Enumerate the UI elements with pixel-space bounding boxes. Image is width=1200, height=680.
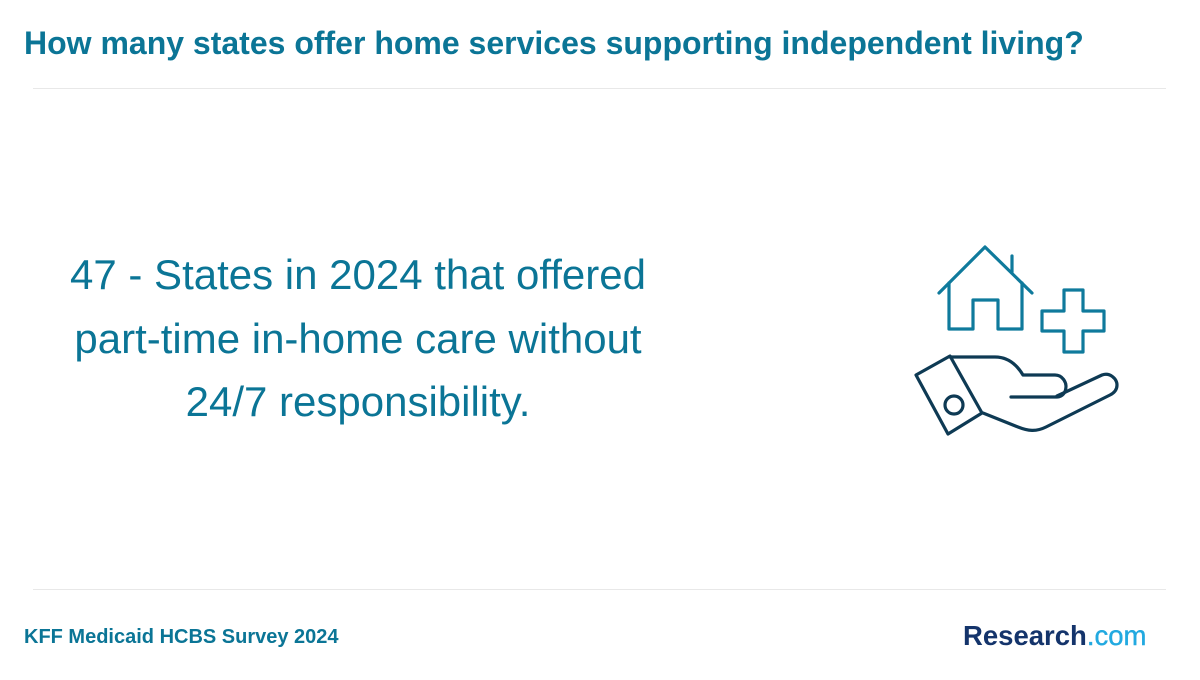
icon: hand holding house and medical cross bbox=[914, 245, 1119, 436]
icon: hand bbox=[916, 356, 1117, 434]
statistic text: 24/7 responsibility. bbox=[186, 378, 530, 425]
statistic text: 47 - States in 2024 that offered bbox=[70, 251, 646, 298]
title: How many states offer home services supporting independent living? bbox=[24, 25, 1084, 61]
logo: Research.com: Research.com bbox=[963, 620, 1146, 651]
icon: medical cross bbox=[1042, 290, 1104, 352]
statistic text bbox=[70, 251, 646, 425]
icon: house bbox=[939, 247, 1032, 329]
source note: KFF Medicaid HCBS Survey 2024 bbox=[24, 626, 339, 648]
statistic text: part-time in-home care without bbox=[74, 314, 642, 362]
